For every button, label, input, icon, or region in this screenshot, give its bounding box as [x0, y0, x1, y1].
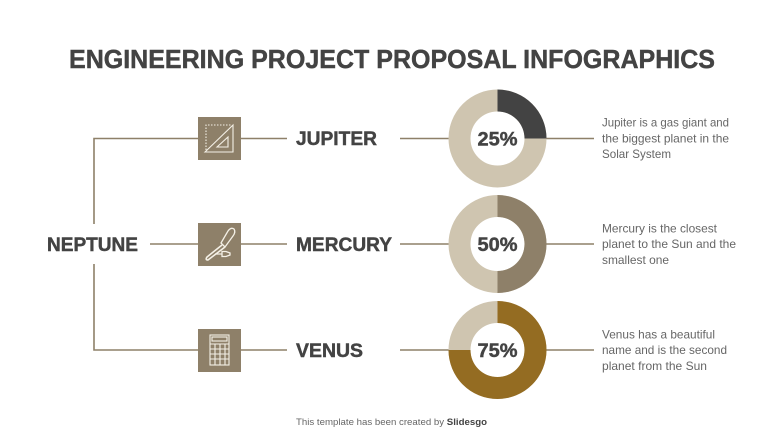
donut chart: 25%	[460, 90, 546, 176]
donut chart: 50%: 50%	[478, 234, 518, 256]
description: Venus: Venus has a beautiful	[602, 328, 715, 342]
description: Venus: name and is the second	[602, 343, 727, 357]
label: Venus: VENUS	[296, 341, 363, 362]
description: Mercury: smallest one	[602, 253, 669, 267]
icon: set square	[198, 117, 241, 160]
description: Mercury: planet to the Sun and the	[602, 237, 736, 251]
description: Jupiter	[602, 116, 729, 161]
icon: screwdriver and screw	[198, 223, 241, 266]
icon: calculator	[198, 329, 241, 372]
description: Jupiter: the biggest planet in the	[602, 132, 729, 146]
description: Jupiter: Jupiter is a gas giant and	[602, 116, 729, 130]
donut chart: 75%	[448, 301, 546, 399]
description: Mercury: Mercury is the closest	[602, 222, 718, 236]
donut chart: 50%	[460, 195, 546, 293]
label: Mercury: MERCURY	[296, 235, 392, 256]
footer credit: This template has been created by Slidesgo	[296, 417, 487, 428]
donut chart: 25%: 25%	[478, 128, 518, 150]
description: Jupiter: Solar System	[602, 147, 671, 161]
description: Venus	[602, 328, 727, 373]
title: ENGINEERING PROJECT PROPOSAL INFOGRAPHICS	[69, 44, 715, 74]
description: Mercury	[602, 222, 736, 267]
root label: Neptune: NEPTUNE	[47, 234, 138, 256]
label: Jupiter: JUPITER	[296, 129, 377, 150]
donut chart: 75%: 75%	[478, 340, 518, 362]
connector lines	[94, 138, 594, 350]
description: Venus: planet from the Sun	[602, 359, 707, 373]
